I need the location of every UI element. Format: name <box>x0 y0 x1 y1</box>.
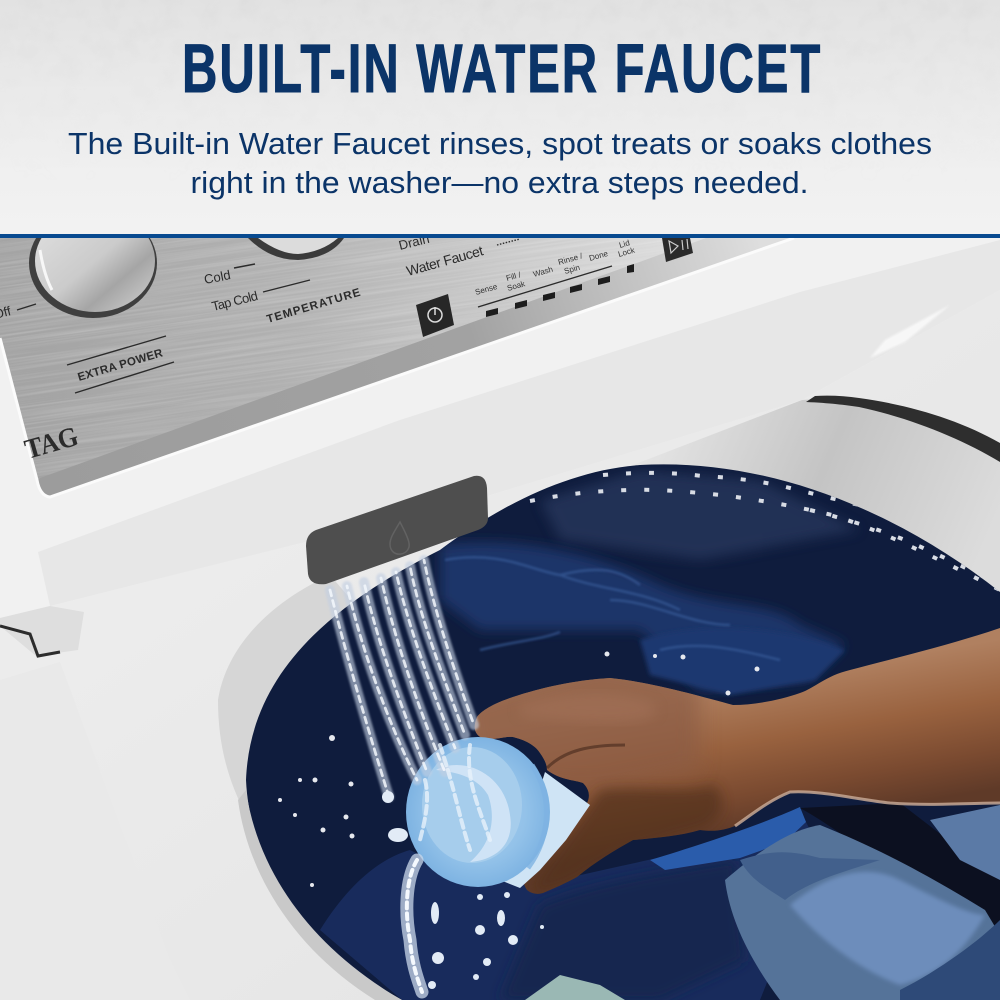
lower rim edge <box>238 790 402 1000</box>
tub rim <box>218 575 360 840</box>
status lights <box>486 264 634 317</box>
knob: power <box>29 208 157 318</box>
wrist crease <box>735 792 1000 826</box>
panel labels <box>0 231 485 466</box>
washer lower body <box>0 290 1000 1000</box>
knob: temperature <box>248 238 344 260</box>
tub upper highlight <box>540 470 860 560</box>
panel labels: EXTRA POWER <box>76 347 165 384</box>
panel labels: TEMPERATURE <box>265 287 362 326</box>
lower shirt <box>320 810 820 1000</box>
tub interior <box>240 450 1000 1000</box>
cycle status labels: Soak <box>506 279 527 293</box>
water over the cup <box>420 745 490 850</box>
lid lower face <box>38 240 1000 606</box>
rear gasket <box>806 396 1000 462</box>
cycle status labels: Rinse / <box>557 251 584 267</box>
panel labels: Water Faucet <box>405 242 485 279</box>
subtitle <box>68 126 932 200</box>
cycle status labels <box>474 238 637 297</box>
body shading <box>0 662 190 1000</box>
subtitle: The Built-in Water Faucet rinses, spot treats or soaks clothes <box>68 126 932 161</box>
header band <box>0 0 1000 238</box>
panel labels: Tap Cold <box>210 288 259 314</box>
panel labels: Cold <box>203 267 232 287</box>
title: BUILT-IN WATER FAUCET <box>182 30 820 107</box>
mint cloth <box>525 975 625 1000</box>
bright blue cloth <box>650 807 806 870</box>
panel labels: TAG <box>21 421 82 466</box>
hand base tone <box>475 678 704 792</box>
tub rear wall <box>620 399 1000 610</box>
cycle status labels: Wash <box>532 265 554 279</box>
cycle status labels: Lock <box>617 245 637 259</box>
detergent cup <box>406 737 590 888</box>
hand shading <box>475 678 725 887</box>
panel labels: Drain <box>397 231 431 253</box>
dark gap in clothes <box>800 803 1000 935</box>
lid hinge <box>0 606 84 656</box>
palm shadow <box>530 785 722 893</box>
cycle status labels: Sense <box>474 282 499 297</box>
cycle status labels: Done <box>588 249 609 263</box>
denim fabric <box>725 825 1000 1000</box>
faucet <box>306 476 488 584</box>
cycle status labels: Fill / <box>505 270 522 283</box>
cycle status labels: Lid <box>618 238 631 250</box>
splash stream <box>407 860 422 992</box>
clothes upper <box>440 542 845 690</box>
water droplets <box>382 791 544 989</box>
perforation rows <box>530 473 1000 590</box>
panel lines <box>17 239 612 393</box>
cycle status labels: Spin <box>563 263 581 276</box>
arm and hand <box>460 628 1000 894</box>
start button <box>662 238 693 262</box>
cloth ripples <box>445 557 780 660</box>
crease highlight <box>870 305 950 358</box>
lid band <box>0 238 1000 618</box>
tub floor holes <box>278 652 760 887</box>
knuckle highlight <box>520 692 656 723</box>
control panel <box>0 238 794 498</box>
running water <box>330 560 490 992</box>
subtitle: right in the washer—no extra steps needed. <box>190 165 808 200</box>
power button <box>416 294 454 337</box>
washer photo <box>0 238 1000 1000</box>
